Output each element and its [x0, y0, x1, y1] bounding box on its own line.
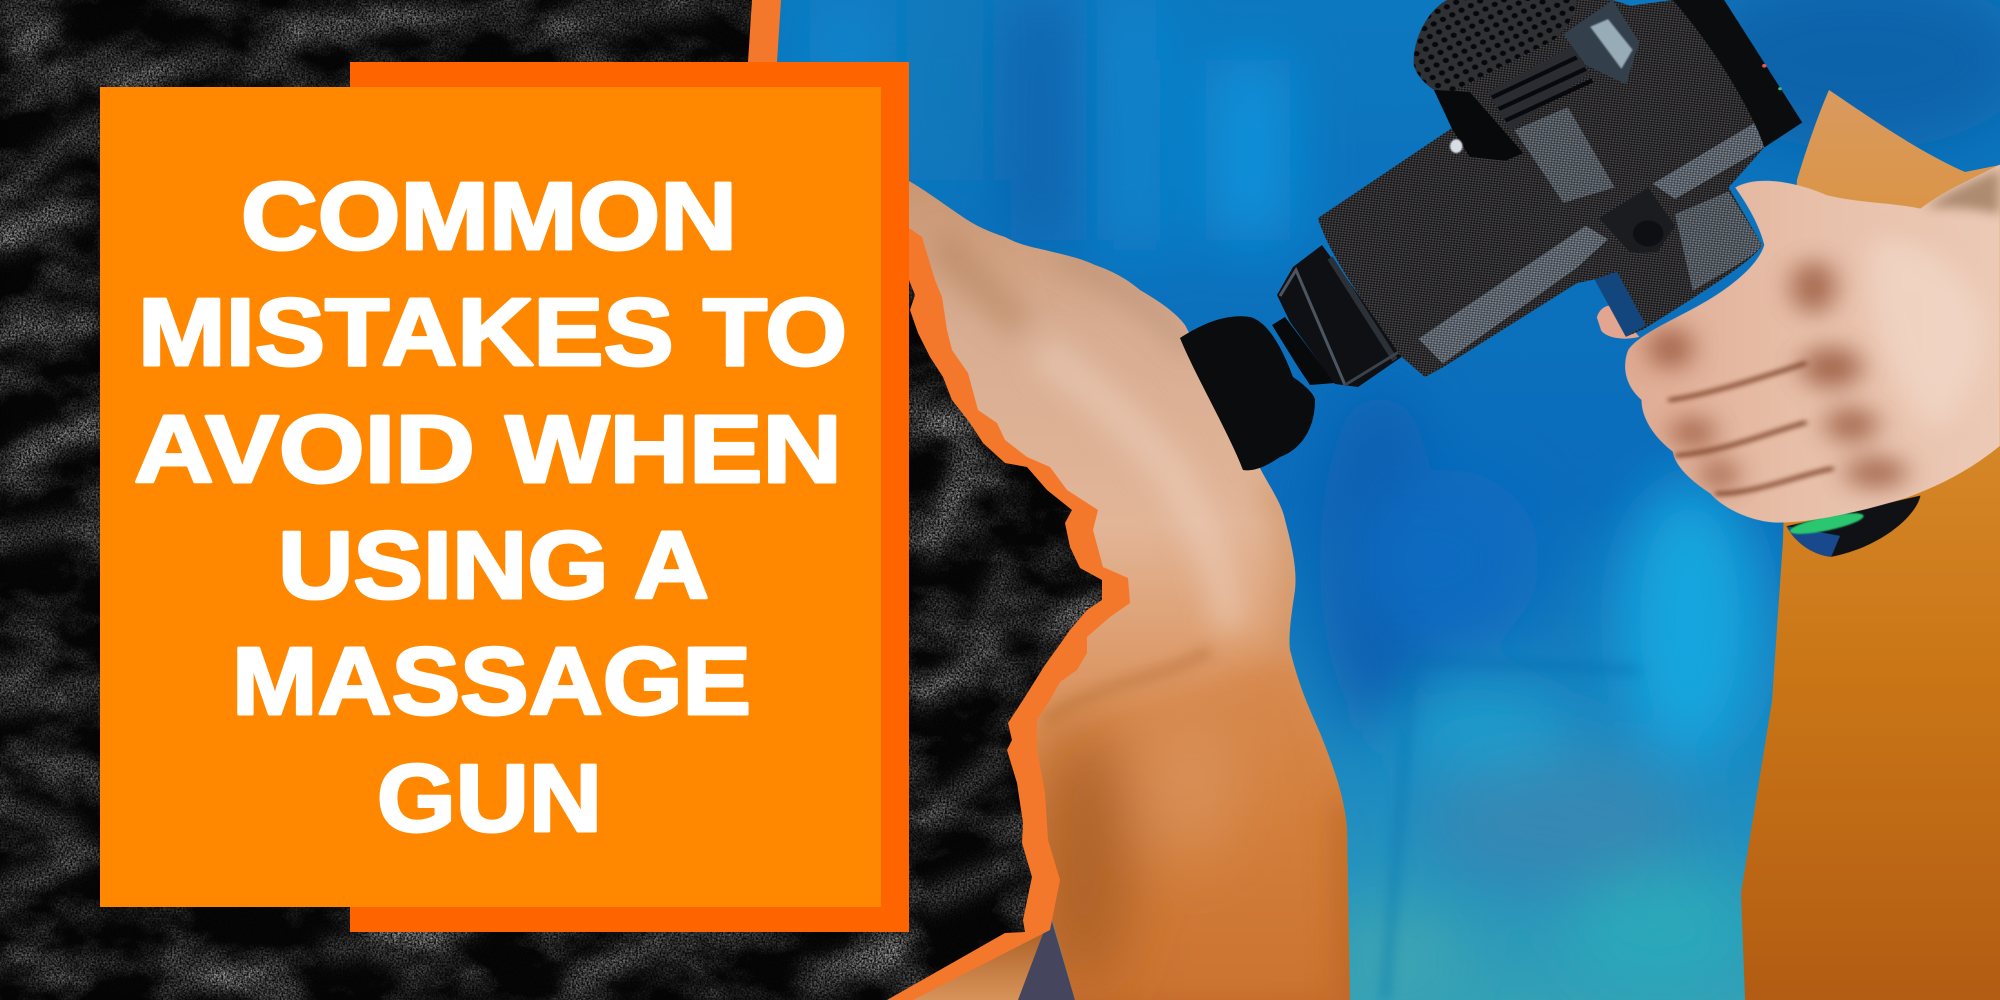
title: MISTAKES TO: [138, 279, 847, 386]
title panel: dark orange backing: [350, 62, 909, 932]
photo: massage gun head pad: [1180, 316, 1315, 470]
background photo: blue shirt: [700, 0, 2000, 1000]
torn paper: black crumpled texture: [0, 0, 1140, 1000]
title: COMMON: [241, 163, 737, 270]
title: MASSAGE: [232, 628, 751, 735]
photo: hand: [1612, 161, 2000, 528]
photo: massage gun neck and collar: [1272, 245, 1403, 387]
photo: fingertip behind grip: [1597, 306, 1639, 339]
torn paper: orange edge: [700, 0, 1130, 1000]
title: [134, 163, 847, 852]
title: USING A: [278, 512, 709, 619]
title: AVOID WHEN: [134, 396, 842, 503]
photo: massage gun body: [1318, 0, 1802, 377]
title: GUN: [377, 745, 602, 852]
photo: bare arm: [880, 180, 1360, 1000]
photo: massage gun base with green light: [1787, 496, 1920, 557]
photo: hand and gun assembly: [1318, 0, 2000, 557]
title panel: orange box: [100, 87, 881, 907]
background photo: orange backdrop: [1741, 90, 2000, 1000]
